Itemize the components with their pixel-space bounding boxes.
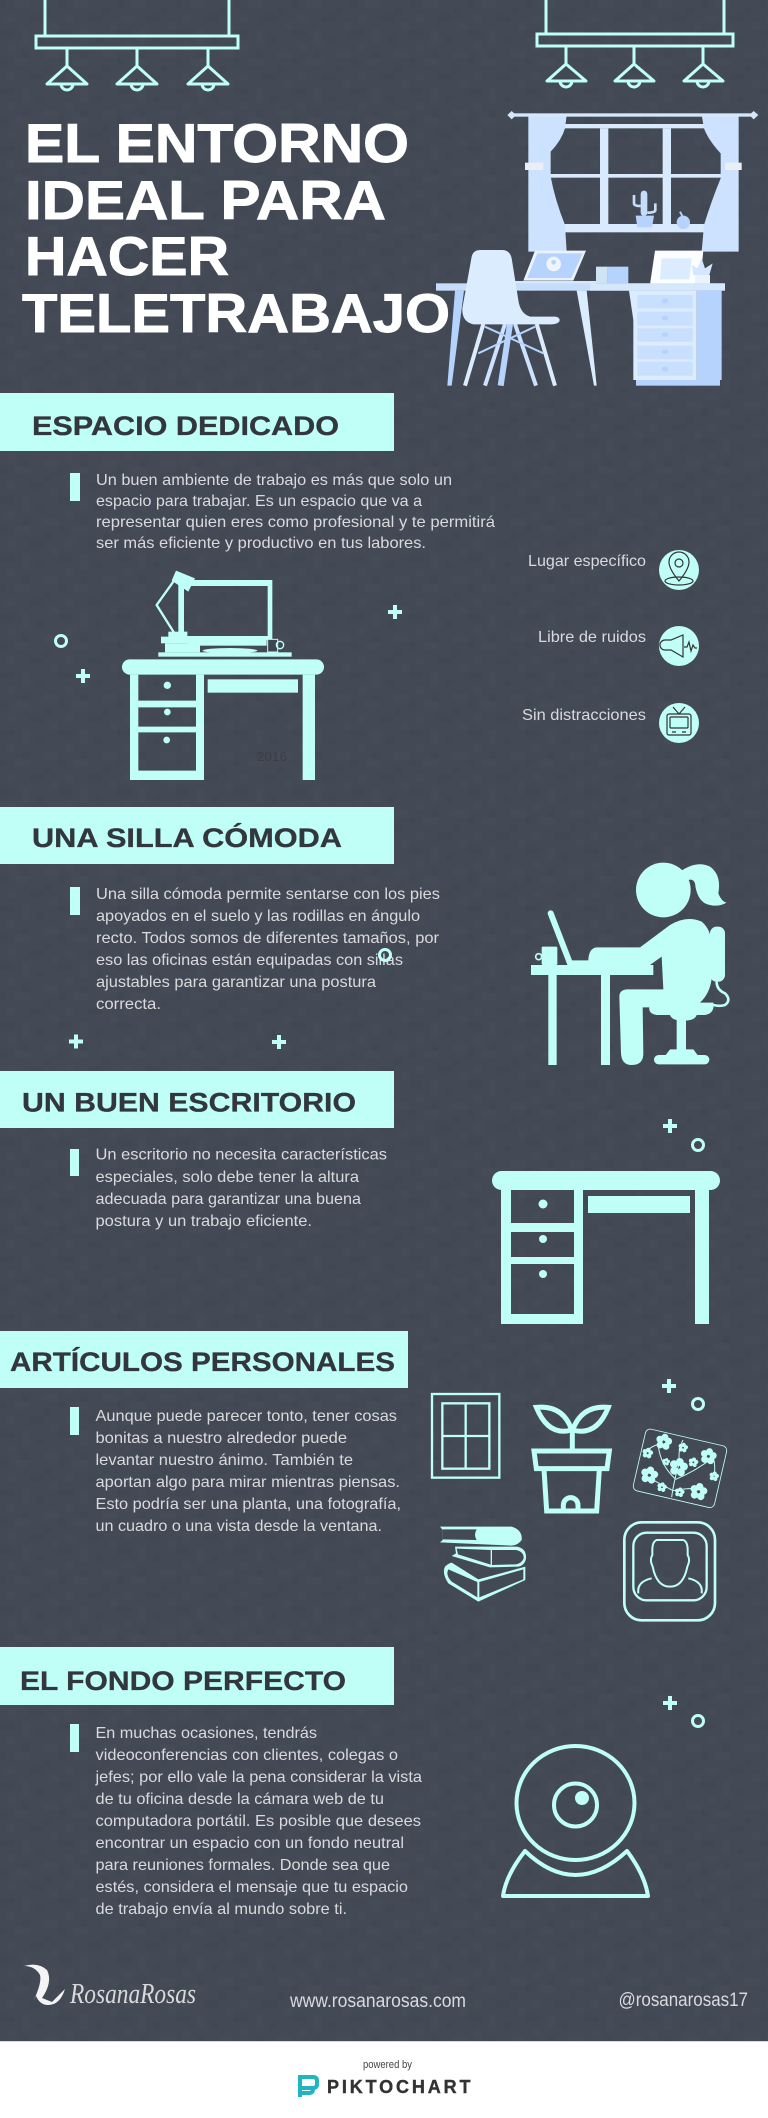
laptop	[515, 251, 597, 284]
icon: potted plant	[534, 1407, 609, 1511]
body text: adecuada para garantizar una buena	[96, 1191, 361, 1208]
panel: una silla cómoda	[0, 807, 728, 1065]
decorative plus and ring	[663, 1119, 704, 1150]
panel: el fondo perfecto	[0, 1647, 704, 1918]
social handle: @rosanarosas17	[618, 1990, 748, 2011]
bullet bar	[70, 887, 80, 915]
body text	[96, 1146, 387, 1230]
title: HACER	[25, 225, 229, 287]
icon: person seated at laptop	[531, 863, 728, 1065]
illustration: home office with window, chair and desk	[436, 111, 758, 386]
heading banner: UNA SILLA CÓMODA	[32, 822, 342, 853]
bullet bar	[70, 473, 80, 501]
label: libre de ruidos: Libre de ruidos	[538, 629, 646, 646]
body text: de trabajo envía al mundo sobre ti.	[96, 1901, 347, 1918]
body text: Aunque puede parecer tonto, tener cosas	[96, 1408, 397, 1425]
label: sin distracciones: Sin distracciones	[522, 707, 646, 724]
decorative plus marks and ring: silla	[69, 950, 390, 1049]
heading banner	[0, 1071, 394, 1128]
heading banner: UN BUEN ESCRITORIO	[22, 1088, 356, 1118]
icon: desk	[492, 1171, 720, 1324]
faint year label: 2016	[257, 749, 287, 764]
body text: ajustables para garantizar una postura	[96, 974, 376, 991]
icon: left ceiling lamp	[36, 0, 238, 90]
decorative plus and ring	[663, 1696, 704, 1726]
heading banner: EL FONDO PERFECTO	[20, 1666, 346, 1696]
body text: En muchas ocasiones, tendrás	[96, 1725, 317, 1742]
body text: Un buen ambiente de trabajo es más que solo un	[96, 472, 452, 489]
body text: representar quien eres como profesional y te permitirá	[96, 514, 495, 531]
title: IDEAL PARA	[25, 169, 386, 231]
title: TELETRABAJO	[22, 282, 450, 344]
decorative plus marks and rings: espacio dedicado	[56, 605, 402, 683]
drawer unit	[629, 291, 722, 386]
bullet bar	[70, 1724, 79, 1752]
body text: ser más eficiente y productivo en tus labores.	[96, 535, 426, 552]
body text: correcta.	[96, 996, 161, 1013]
icon: stack of books	[440, 1527, 526, 1602]
body text: computadora portátil. Es posible que desees	[96, 1813, 421, 1830]
label: lugar específico	[528, 550, 699, 590]
title	[22, 112, 450, 344]
logo: Rosana Rosas	[24, 1965, 196, 2010]
body text: postura y un trabajo eficiente.	[96, 1213, 312, 1230]
body text: Una silla cómoda permite sentarse con los pies	[96, 886, 440, 903]
body text	[96, 472, 495, 552]
powered by: powered by	[363, 2059, 412, 2071]
heading banner: ARTÍCULOS PERSONALES	[10, 1346, 395, 1377]
body text: Esto podría ser una planta, una fotografía,	[96, 1496, 401, 1513]
curtain ties	[525, 163, 742, 170]
icon: desk with lamp and monitor	[122, 571, 324, 780]
panel: un buen escritorio	[0, 1071, 720, 1324]
body text: espacio para trabajar. Es un espacio que va a	[96, 493, 422, 510]
body text: jefes; por ello vale la pena considerar la vista	[94, 1769, 422, 1786]
body text: aportan algo para mirar mientras piensas.	[96, 1474, 400, 1491]
labels with icons	[522, 550, 699, 743]
title: EL ENTORNO	[25, 112, 409, 174]
body text: levantar nuestro ánimo. También te	[96, 1452, 353, 1469]
body text: eso las oficinas están equipadas con sillas	[96, 952, 403, 969]
heading banner	[0, 1647, 394, 1705]
footer: piktochart	[0, 2041, 768, 2118]
icon: portrait frame	[624, 1522, 715, 1620]
label: sin distracciones	[522, 703, 699, 743]
body text: recto. Todos somos de diferentes tamaños, por	[96, 930, 440, 947]
body text: un cuadro o una vista desde la ventana.	[96, 1518, 382, 1535]
body text	[96, 1408, 401, 1535]
window frame	[547, 124, 723, 232]
body text	[94, 1725, 422, 1918]
heading banner	[0, 807, 394, 864]
heading banner: ESPACIO DEDICADO	[32, 411, 339, 441]
body text: especiales, solo debe tener la altura	[96, 1169, 359, 1186]
decorative plus and ring	[662, 1379, 704, 1410]
bullet bar	[70, 1407, 79, 1435]
panel: espacio dedicado	[0, 393, 699, 780]
label: libre de ruidos	[538, 626, 699, 666]
heading banner	[0, 1331, 408, 1388]
books on desk	[596, 267, 628, 283]
body text: apoyados en el suelo y las rodillas en ángulo	[96, 908, 420, 925]
icons: personal items	[432, 1394, 728, 1620]
cactus and apple	[634, 191, 690, 229]
curtains	[528, 115, 739, 252]
icon: webcam	[503, 1746, 648, 1896]
label: lugar específico: Lugar específico	[528, 553, 646, 570]
desk top and legs	[436, 283, 725, 386]
panel: artículos personales	[0, 1331, 728, 1620]
icon: piktochart logo	[300, 2077, 317, 2097]
body text: Un escritorio no necesita características	[96, 1146, 387, 1164]
body text: estés, considera el mensaje que tu espacio	[96, 1879, 408, 1896]
icon: window	[432, 1394, 499, 1478]
curtain rod	[507, 111, 758, 119]
body text: para reuniones formales. Donde sea que	[96, 1857, 390, 1874]
body text: bonitas a nuestro alrededor puede	[96, 1430, 347, 1447]
bullet bar	[70, 1149, 79, 1176]
body text	[96, 886, 440, 1013]
body text: videoconferencias con clientes, colegas o	[96, 1747, 398, 1764]
website link: www.rosanarosas.com	[289, 1991, 466, 2012]
body text: encontrar un espacio con un fondo neutral	[96, 1835, 404, 1852]
picture frame and plant	[650, 251, 713, 286]
icon: right ceiling lamp	[537, 0, 733, 87]
body text: de tu oficina desde la cámara web de tu	[96, 1791, 384, 1808]
logo: Rosana Rosas: RosanaRosas	[69, 1978, 196, 2010]
wordmark: PIKTOCHART	[327, 2077, 470, 2097]
icon: floral picture	[632, 1428, 728, 1509]
chair legs	[465, 324, 555, 386]
heading banner	[0, 393, 394, 451]
chair seat	[462, 250, 560, 324]
